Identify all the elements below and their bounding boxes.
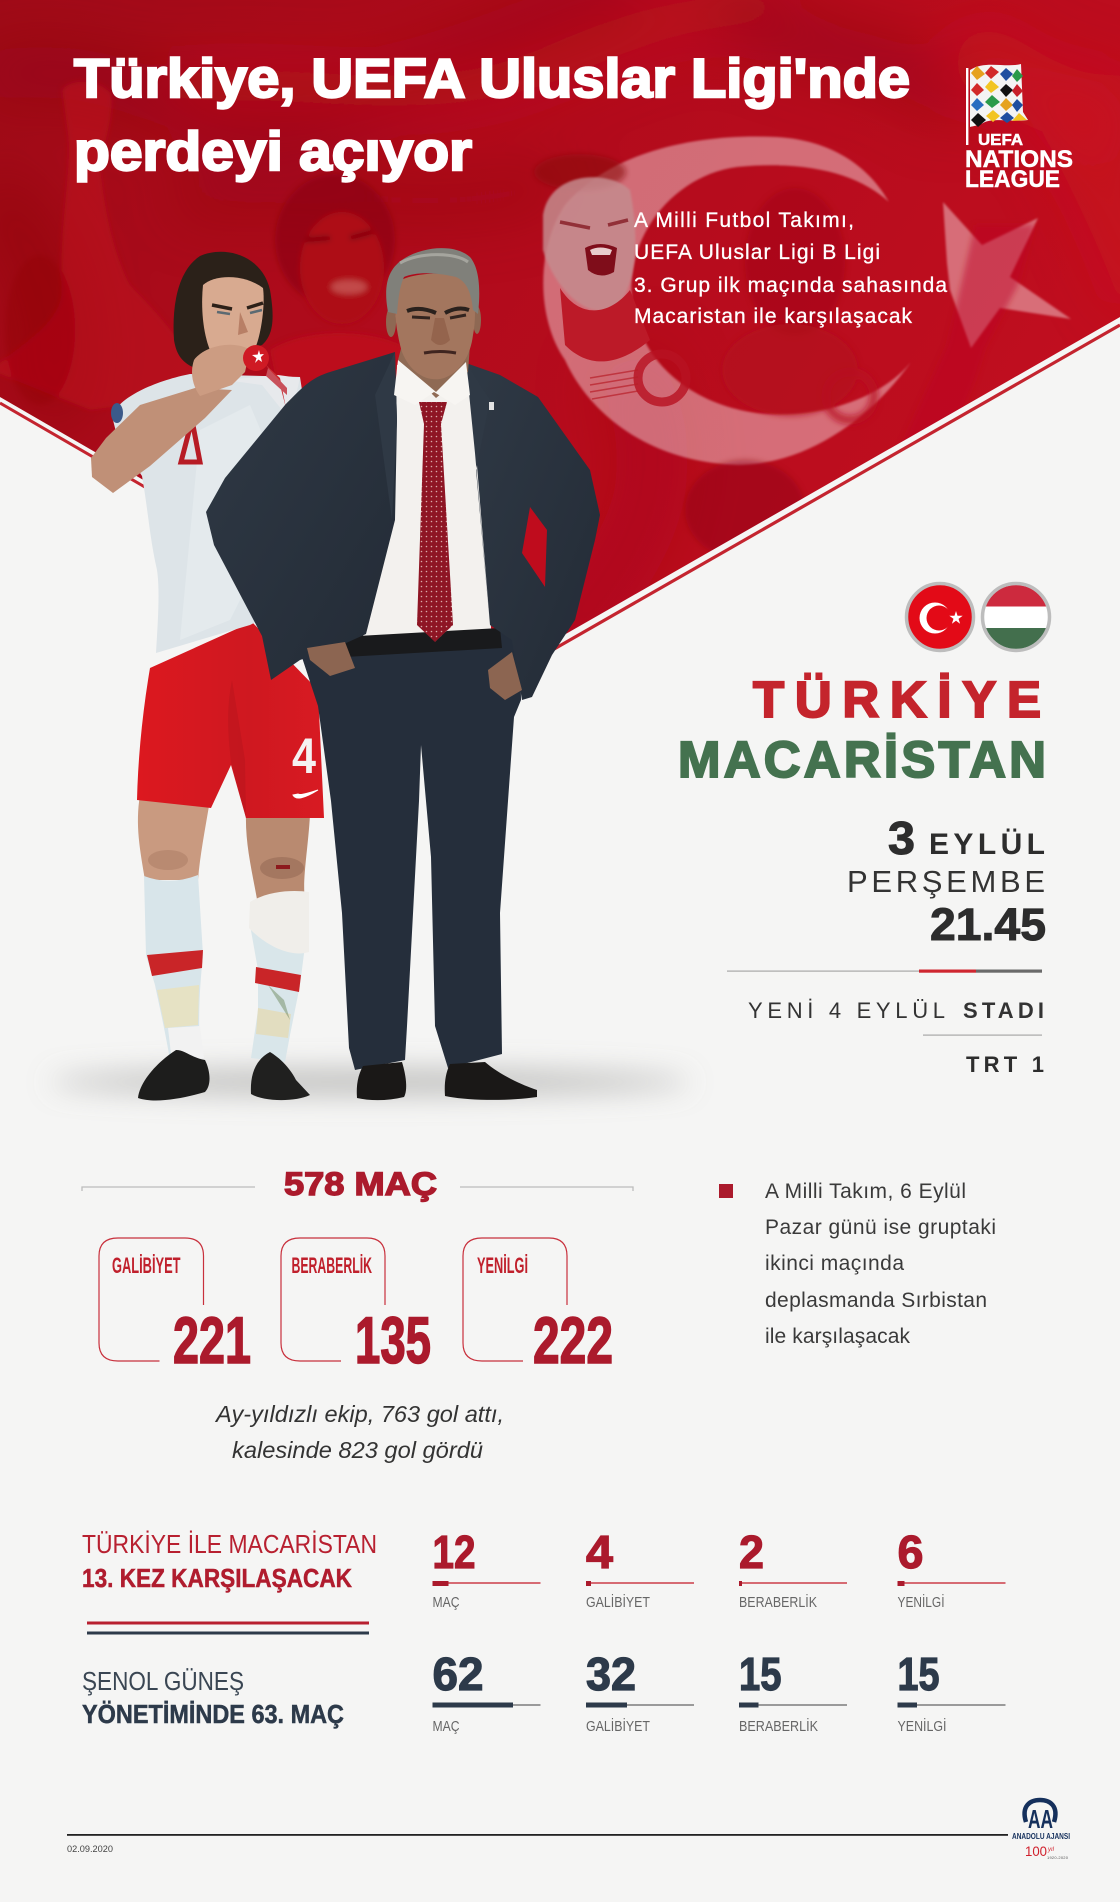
heading: Türkiye vs Hungary: 13. KEZ KARŞILAŞACAK: [82, 1563, 352, 1593]
heading: Türkiye vs Hungary: [82, 1529, 377, 1593]
match date and time: EYLÜL: [929, 828, 1045, 861]
stat: losses: 222: [533, 1303, 613, 1377]
match teams: TÜRKİYE: [753, 671, 1041, 728]
next match note: ikinci maçında: [765, 1252, 904, 1275]
player figure: [91, 252, 324, 1100]
coach arm gap: [522, 507, 547, 587]
icon: UEFA Nations League logo: [965, 64, 1073, 193]
record heading: 578 MAÇ: [284, 1166, 437, 1202]
logo wordmark: [965, 132, 1073, 193]
heading: coach record: ŞENOL GÜNEŞ: [82, 1666, 244, 1696]
lapel pin: [489, 402, 494, 410]
stat: matches: 62: [432, 1648, 484, 1700]
coach hands: [307, 642, 355, 676]
icon: Turkish flag badge: [906, 584, 974, 650]
logo wordmark: NATIONS: [965, 146, 1073, 173]
stat: draws: 2: [739, 1526, 764, 1578]
stat: losses: YENİLGİ: [898, 1717, 946, 1735]
stat: matches: 12: [432, 1526, 476, 1578]
stat: losses: 6: [898, 1526, 924, 1578]
next match note: Pazar günü ise gruptaki: [765, 1216, 996, 1239]
title: perdeyi açıyor: [74, 120, 472, 182]
stat: losses: 15: [898, 1648, 940, 1700]
stat: wins: 221: [173, 1303, 251, 1377]
stat: wins: GALİBİYET: [112, 1253, 181, 1278]
stat: losses: [898, 1526, 1006, 1611]
stat: losses: YENİLGİ: [477, 1253, 528, 1278]
coach trousers: [293, 630, 521, 1070]
match teams: MACARİSTAN: [678, 731, 1046, 788]
coach shirt: [362, 365, 492, 640]
banner edge lines: [0, 325, 1120, 680]
stat: matches: [432, 1648, 540, 1735]
next match note: [719, 1180, 996, 1348]
divider under match time: [727, 970, 1042, 973]
icon: Anadolu Agency logo: ANADOLU AJANSI: [1012, 1831, 1070, 1841]
shorts number: 4: [292, 728, 316, 784]
shorts swoosh: [293, 790, 318, 798]
match date and time: 3: [888, 812, 915, 864]
coach jacket: [206, 352, 397, 680]
heading: coach record: [82, 1666, 344, 1729]
match teams: [678, 671, 1046, 788]
heading: coach record: YÖNETİMİNDE 63. MAÇ: [82, 1699, 344, 1729]
ghost: second player face: [271, 174, 401, 388]
intro text: A Milli Futbol Takımı,: [634, 209, 854, 232]
head to head stats: [432, 1526, 1006, 1611]
logo wordmark: UEFA: [978, 132, 1023, 149]
player hand and star cuff: [192, 345, 250, 396]
stat: losses: [898, 1648, 1006, 1735]
intro text: [634, 209, 947, 328]
stat: draws: BERABERLİK: [739, 1593, 817, 1611]
player shorts: [137, 622, 324, 818]
player socks: [144, 875, 203, 1060]
icon: Anadolu Agency logo: 1920-2020: [1047, 1855, 1069, 1860]
coach stats: [432, 1648, 1006, 1735]
venue: YENİ 4 EYLÜL: [748, 998, 945, 1023]
icon: Anadolu Agency logo: AA: [1028, 1804, 1053, 1834]
player boots: [138, 1050, 210, 1100]
all-time record panel: [82, 1166, 633, 1463]
player shirt: [112, 374, 322, 653]
shirt badge: [111, 403, 123, 423]
stat: draws: 135: [355, 1303, 431, 1377]
next match note: deplasmanda Sırbistan: [765, 1289, 987, 1312]
player legs: [138, 795, 210, 880]
stat: wins: 4: [586, 1526, 613, 1578]
intro text: Macaristan ile karşılaşacak: [634, 305, 912, 328]
title: Türkiye, UEFA Uluslar Ligi'nde: [74, 47, 910, 109]
double divider: [87, 1622, 369, 1634]
coach figure: [206, 248, 600, 1100]
intro text: 3. Grup ilk maçında sahasında: [634, 274, 947, 297]
red flag banner with ghosted players: [0, 0, 1120, 700]
coach belt: [340, 628, 502, 657]
stat: wins: GALİBİYET: [586, 1717, 650, 1735]
match date and time: PERŞEMBE: [847, 864, 1045, 899]
coach tie: [417, 402, 453, 642]
next match note: A Milli Takım, 6 Eylül: [765, 1180, 966, 1203]
stat: draws: BERABERLİK: [739, 1717, 818, 1735]
logo wordmark: LEAGUE: [965, 166, 1060, 193]
venue: STADI: [963, 998, 1044, 1023]
stat: draws: [739, 1648, 847, 1735]
stat: draws: BERABERLİK: [292, 1253, 372, 1278]
icon: Anadolu Agency logo: [1012, 1800, 1070, 1860]
ghost: raised arm left player: [0, 82, 210, 410]
coach shoes: [357, 1062, 406, 1100]
goals note: [214, 1401, 504, 1463]
logo flag: [970, 64, 1028, 127]
stat: matches: MAÇ: [432, 1594, 460, 1611]
icon: Anadolu Agency logo: yıl: [1047, 1847, 1055, 1853]
stat: draws: [739, 1526, 847, 1611]
goals note: kalesinde 823 gol gördü: [232, 1437, 483, 1463]
stat: wins: [586, 1526, 694, 1611]
stat: matches: MAÇ: [432, 1718, 460, 1735]
ghost: crescent and star: [543, 136, 1071, 465]
stat: matches: [432, 1526, 540, 1611]
player arm: [91, 388, 232, 493]
stat: wins: GALİBİYET: [586, 1593, 650, 1611]
ghost: right player and raised arm: [685, 188, 1035, 560]
broadcaster: TRT 1: [966, 1052, 1044, 1077]
title: [74, 47, 910, 182]
heading: Türkiye vs Hungary: TÜRKİYE İLE MACARİSTAN: [82, 1529, 377, 1559]
goals note: Ay-yıldızlı ekip, 763 gol attı,: [214, 1401, 504, 1427]
match date and time: [847, 812, 1046, 950]
player hair and face: [174, 252, 273, 368]
stat: wins: [586, 1648, 694, 1735]
icon: Hungarian flag badge: [980, 583, 1052, 652]
intro text: UEFA Uluslar Ligi B Ligi: [634, 241, 880, 264]
footer line: [67, 1834, 1008, 1836]
match date and time: 21.45: [930, 899, 1046, 950]
stat: losses: [463, 1238, 613, 1377]
ghost: shouting player: [534, 154, 686, 402]
stat: wins: 32: [586, 1648, 636, 1700]
icon: Anadolu Agency logo: 100: [1025, 1843, 1047, 1859]
stat: draws: [281, 1238, 431, 1377]
stat: draws: 15: [739, 1648, 782, 1700]
coach neck and head: [398, 345, 470, 398]
venue: [748, 998, 1044, 1023]
next match note: ile karşılaşacak: [765, 1325, 910, 1348]
stat: wins: [99, 1238, 251, 1377]
footer date: 02.09.2020: [67, 1844, 113, 1855]
ground shadow: [50, 1070, 690, 1094]
stat: losses: YENİLGİ: [898, 1593, 944, 1611]
